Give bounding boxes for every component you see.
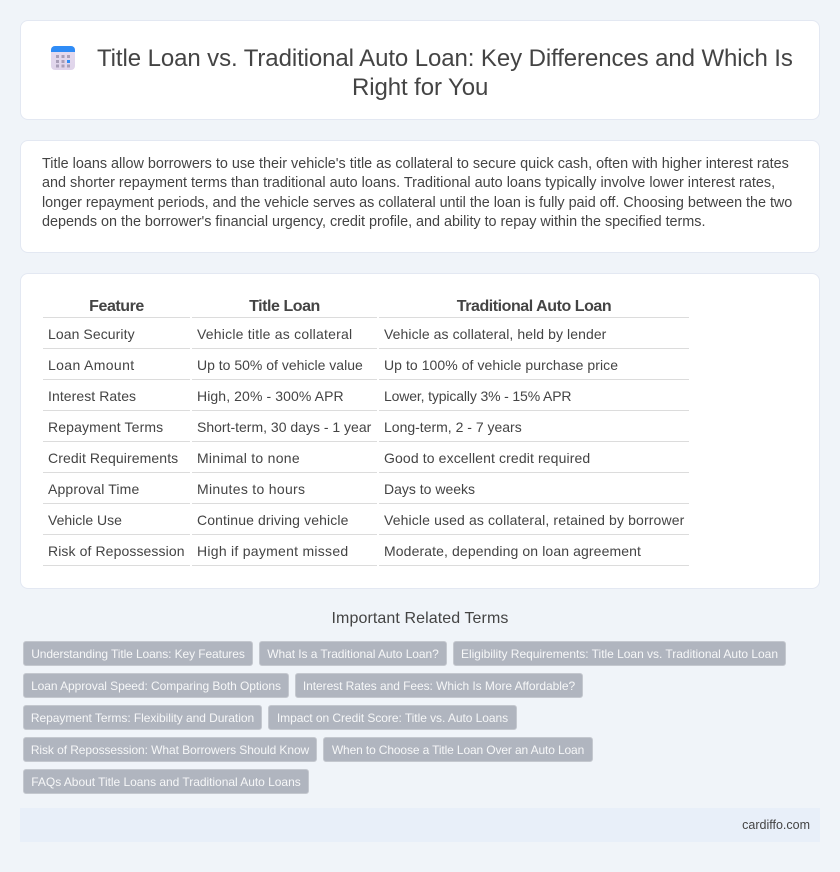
panel: comparison table: High if payment missed [197, 543, 348, 559]
panel: comparison table: Vehicle used as collateral, retained by borrower [384, 512, 684, 528]
tag [23, 673, 289, 698]
row: loan amount: Loan Amount [48, 357, 134, 373]
panel: comparison table: Up to 50% of vehicle value [197, 357, 363, 373]
row: interest rates: Interest Rates [48, 388, 136, 404]
intro paragraph [42, 156, 792, 230]
panel: intro text [20, 140, 820, 253]
tag: Understanding Title Loans: Key Features [31, 647, 245, 661]
tag: What Is a Traditional Auto Loan? [267, 647, 439, 661]
footer bar [20, 808, 820, 842]
intro paragraph: and shorter repayment terms than traditional auto loans. Traditional auto loans typically involve lower interest rates, [42, 174, 775, 190]
panel: comparison table: Continue driving vehicle [197, 512, 349, 528]
table header: feature: Feature [89, 298, 144, 315]
tag [23, 737, 317, 762]
intro paragraph: depends on the borrower's financial urgency, credit profile, and ability to repay within the specified terms. [42, 214, 705, 230]
row: credit requirements: Credit Requirements [48, 450, 178, 466]
panel: comparison table: Vehicle as collateral, held by lender [384, 326, 606, 342]
tag: Loan Approval Speed: Comparing Both Options [31, 679, 281, 693]
panel: comparison table: Vehicle title as collateral [197, 326, 352, 342]
title [97, 45, 793, 101]
title: Right for You [352, 74, 488, 101]
panel: comparison table: Good to excellent credit required [384, 450, 590, 466]
tag [23, 705, 262, 730]
panel: comparison table: High, 20% - 300% APR [197, 388, 344, 404]
tag: FAQs About Title Loans and Traditional Auto Loans [31, 775, 301, 789]
panel: comparison table: Minutes to hours [197, 481, 305, 497]
table header: traditional auto loan: Traditional Auto Loan [457, 298, 611, 315]
panel: comparison table: Moderate, depending on loan agreement [384, 543, 641, 559]
panel: comparison table: Long-term, 2 - 7 years [384, 419, 522, 435]
row: loan security: Loan Security [48, 326, 135, 342]
row: approval time: Approval Time [48, 481, 139, 497]
tag: Interest Rates and Fees: Which Is More Affordable? [303, 679, 575, 693]
tag [259, 641, 447, 666]
tag [23, 769, 309, 794]
panel: comparison table: Lower, typically 3% - 15% APR [384, 388, 571, 404]
table header: title loan: Title Loan [249, 298, 320, 315]
row: repayment terms: Repayment Terms [48, 419, 163, 435]
tag: When to Choose a Title Loan Over an Auto Loan [332, 743, 584, 757]
panel: comparison table: Up to 100% of vehicle purchase price [384, 357, 618, 373]
row: vehicle use: Vehicle Use [48, 512, 122, 528]
icon: calendar [51, 46, 75, 70]
intro paragraph: Title loans allow borrowers to use their vehicle's title as collateral to secure quick cash, often with higher interest rates [42, 156, 789, 172]
tag: Eligibility Requirements: Title Loan vs. Traditional Auto Loan [461, 647, 778, 661]
footer source: cardiffo.com [742, 818, 810, 832]
panel: comparison table [20, 273, 820, 589]
panel: comparison table: Days to weeks [384, 481, 475, 497]
panel: header [20, 20, 820, 120]
title: Title Loan vs. Traditional Auto Loan: Key Differences and Which Is [97, 45, 793, 72]
tag: Risk of Repossession: What Borrowers Should Know [31, 743, 309, 757]
tag [453, 641, 786, 666]
tag: Impact on Credit Score: Title vs. Auto Loans [277, 711, 508, 725]
panel: comparison table: Minimal to none [197, 450, 300, 466]
tag: Repayment Terms: Flexibility and Duration [31, 711, 254, 725]
tag [323, 737, 593, 762]
intro paragraph: longer repayment periods, and the vehicle serves as collateral until the loan is fully paid off. Choosing between the two [42, 195, 792, 211]
heading: important related terms: Important Related Terms [332, 610, 508, 627]
row: risk of repossession: Risk of Repossession [48, 543, 185, 559]
tag [295, 673, 583, 698]
tag [268, 705, 517, 730]
tag [23, 641, 253, 666]
panel: comparison table: Short-term, 30 days - 1 year [197, 419, 371, 435]
